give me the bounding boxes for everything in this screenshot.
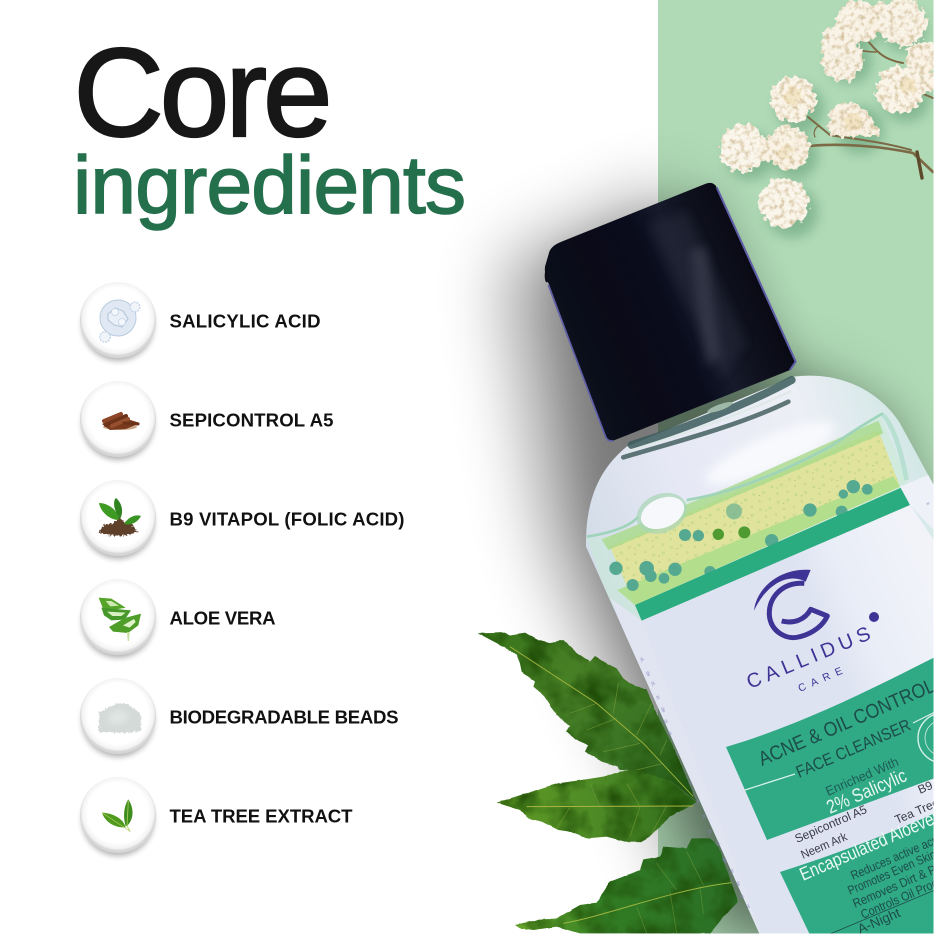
leaf: bottom xyxy=(515,838,738,933)
bottle neck rings xyxy=(623,380,792,457)
label paper xyxy=(642,505,934,856)
back label tiny text: de xyxy=(673,751,680,758)
beads xyxy=(609,480,873,591)
stems xyxy=(777,34,933,178)
item: sepicontrol a5 xyxy=(80,381,334,460)
label: biodegradable beads: BIODEGRADABLE BEADS xyxy=(170,706,398,728)
label: sepicontrol a5: SEPICONTROL A5 xyxy=(170,410,334,430)
back label tiny text: ol, xyxy=(687,781,694,787)
icon: tea leaves xyxy=(102,799,133,832)
leaf: top xyxy=(478,633,697,802)
enriched with: Enriched With xyxy=(823,754,901,799)
back label tiny text: te, xyxy=(729,869,736,875)
bottom teal panel xyxy=(780,813,935,935)
benefit lines xyxy=(846,830,935,935)
title: Core: Core xyxy=(74,24,332,163)
item: aloe vera xyxy=(80,579,276,658)
white flower blooms xyxy=(719,0,935,228)
teal stripe xyxy=(635,487,910,621)
flowers xyxy=(719,0,935,238)
back label tiny text: ol xyxy=(739,894,745,899)
liquid band xyxy=(587,413,935,935)
top teal panel xyxy=(726,657,935,840)
trademark mark xyxy=(869,612,879,622)
icon: white powder heap xyxy=(99,703,141,733)
2% salicylic: 2% Salicylic xyxy=(824,766,910,819)
back label tiny text: xt, xyxy=(707,829,714,835)
back label tiny text: ol xyxy=(667,731,673,736)
logo mark xyxy=(754,570,827,638)
label: b9 vitapol: B9 VITAPOL (FOLIC ACID) xyxy=(170,508,404,530)
back label tiny text: de xyxy=(660,707,667,714)
panel: green background xyxy=(658,0,934,935)
item: tea tree extract xyxy=(80,777,353,856)
title xyxy=(73,24,466,231)
back label tiny text: xt. xyxy=(655,695,662,701)
bottle body glass xyxy=(586,376,935,935)
bottle cap xyxy=(545,183,796,441)
back label tiny text: ide xyxy=(721,857,728,864)
divider lines xyxy=(745,774,795,790)
glass highlight xyxy=(699,411,841,496)
back label tiny text: ol, xyxy=(639,657,646,663)
neem leaves xyxy=(478,633,738,933)
green label panels xyxy=(726,657,935,935)
back label tiny text: # xyxy=(925,502,931,506)
green label panels: Neem Ark xyxy=(799,829,850,862)
back label tiny text: de xyxy=(645,671,652,678)
icon: cinnamon sticks xyxy=(102,414,140,430)
item: biodegradable beads xyxy=(80,678,398,757)
icon: aloe slices xyxy=(99,598,141,641)
brand name: CALLIDUS xyxy=(743,623,874,694)
label: aloe vera: ALOE VERA xyxy=(170,608,276,628)
label: tea tree extract: TEA TREE EXTRACT xyxy=(170,806,353,826)
item: salicylic acid xyxy=(80,282,320,361)
icon: molecule bubble xyxy=(100,300,140,342)
dermatology seal xyxy=(918,713,935,763)
back label tiny text: te, xyxy=(701,814,708,820)
back label tiny text: nt xyxy=(745,904,751,910)
back label tiny text xyxy=(639,502,931,910)
back label tiny text: ol, xyxy=(650,681,657,687)
ingredient list xyxy=(80,282,404,856)
brand logo xyxy=(743,570,879,695)
ingredient names: Sepicontrol A5 xyxy=(793,802,869,846)
product type: FACE CLEANSER xyxy=(793,715,913,782)
bottle drop shadow xyxy=(505,190,935,935)
leaf: middle xyxy=(497,770,697,842)
icon: leaves and soil xyxy=(99,498,141,536)
bottle xyxy=(545,183,935,935)
flower shadows xyxy=(726,8,930,238)
back label tiny text: de xyxy=(735,881,742,888)
back label tiny text: nt xyxy=(695,799,701,805)
title: ingredients: ingredients xyxy=(73,140,466,231)
item: b9 vitapol xyxy=(80,480,404,559)
brand subline: CARE xyxy=(796,665,844,695)
back label tiny text: ol, xyxy=(663,719,670,725)
back label tiny text: ol. xyxy=(715,841,722,847)
label: salicylic acid: SALICYLIC ACID xyxy=(170,310,320,332)
air bubble xyxy=(636,492,687,534)
